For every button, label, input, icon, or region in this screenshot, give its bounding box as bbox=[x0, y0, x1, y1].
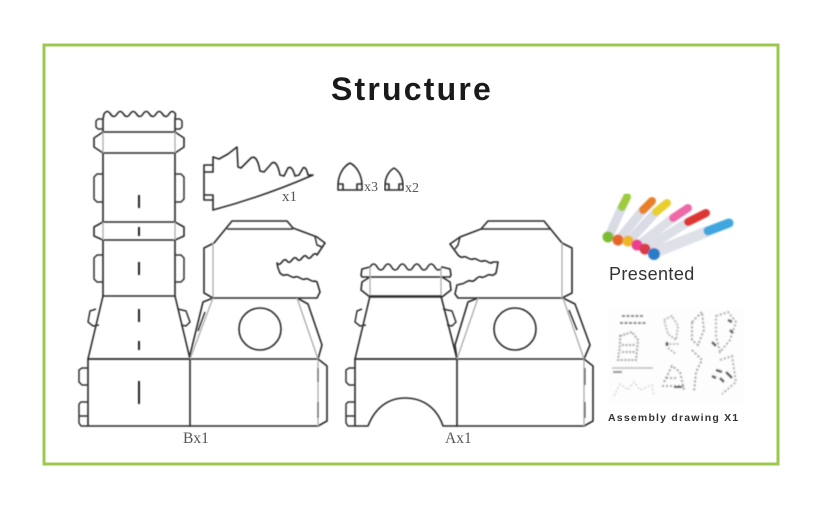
tower of part B bbox=[88, 112, 190, 404]
marker pens bbox=[602, 197, 729, 260]
sheet: assembled model sketch bbox=[618, 332, 638, 360]
label: Assembly drawing X1: Assembly drawing X1 bbox=[608, 412, 739, 424]
orange pen bbox=[612, 201, 652, 246]
red pen bbox=[640, 213, 706, 254]
label: spike x1: x1 bbox=[282, 189, 297, 205]
pink pen bbox=[632, 208, 688, 250]
green pen bbox=[602, 197, 627, 242]
label: Bx1: Bx1 bbox=[183, 430, 209, 447]
sheet: instruction title bbox=[620, 316, 647, 323]
title: Structure bbox=[331, 71, 493, 107]
part A diagram bbox=[346, 221, 593, 426]
small dome x2 bbox=[385, 168, 403, 190]
sheet: step sketches bbox=[664, 316, 680, 354]
small dome x3 bbox=[338, 163, 362, 190]
label: Ax1: Ax1 bbox=[445, 430, 472, 447]
assembly drawing sheet bbox=[609, 308, 745, 406]
part B diagram bbox=[79, 112, 327, 426]
tower of part A bbox=[355, 264, 457, 359]
yellow pen bbox=[622, 203, 667, 246]
base box of part B bbox=[79, 359, 327, 426]
spike piece bbox=[204, 147, 313, 210]
label: dome x2: x2 bbox=[405, 181, 419, 196]
label: Presented: Presented bbox=[609, 264, 695, 284]
head of part B bbox=[190, 221, 325, 359]
base box of part A with arch bbox=[346, 359, 593, 426]
label: dome x3: x3 bbox=[364, 180, 378, 195]
blue pen bbox=[648, 223, 729, 260]
head of part A bbox=[450, 221, 590, 359]
panel: green frame bbox=[44, 45, 778, 464]
